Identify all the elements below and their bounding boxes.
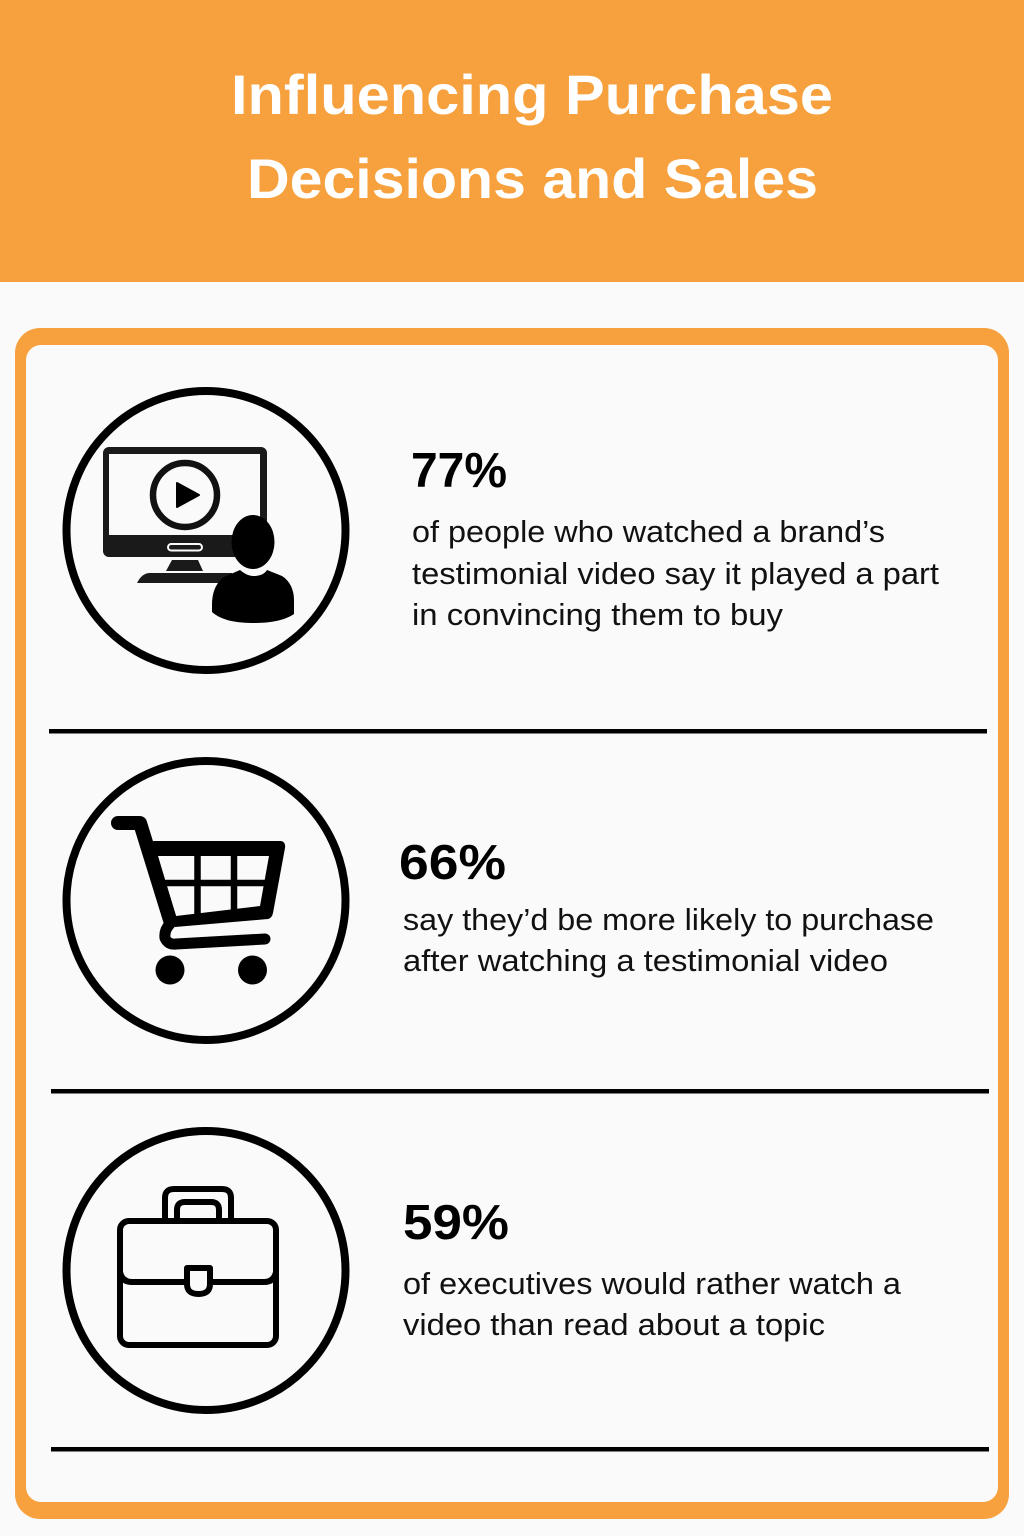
stat row: 77% xyxy=(66,391,939,670)
description: 66% xyxy=(403,902,934,978)
description: 59% xyxy=(403,1266,902,1342)
stat row: 59% xyxy=(66,1131,902,1410)
description: 77%: of people who watched a brand’s xyxy=(412,514,885,549)
icon: briefcase xyxy=(66,1131,346,1410)
stat: 59%: 59% xyxy=(403,1196,509,1250)
description: 77%: testimonial video say it played a part xyxy=(412,556,939,591)
description: 59%: of executives would rather watch a xyxy=(403,1266,902,1301)
stat row: 66% xyxy=(66,761,934,1040)
stat: 66%: 66% xyxy=(399,836,506,890)
description: 66%: after watching a testimonial video xyxy=(403,943,888,978)
description: 77% xyxy=(412,514,939,632)
description: 66%: say they’d be more likely to purchase xyxy=(403,902,934,937)
icon: monitor with play button and viewer xyxy=(66,391,346,670)
title: Influencing Purchase xyxy=(231,63,833,126)
panel: orange rounded frame xyxy=(15,328,1009,1519)
title: Decisions and Sales xyxy=(247,147,818,210)
description: 59%: video than read about a topic xyxy=(403,1307,825,1342)
icon: shopping cart xyxy=(66,761,346,1040)
description: 77%: in convincing them to buy xyxy=(412,597,784,632)
header banner xyxy=(0,0,1024,282)
stat: 77%: 77% xyxy=(411,444,507,498)
title xyxy=(231,63,833,210)
